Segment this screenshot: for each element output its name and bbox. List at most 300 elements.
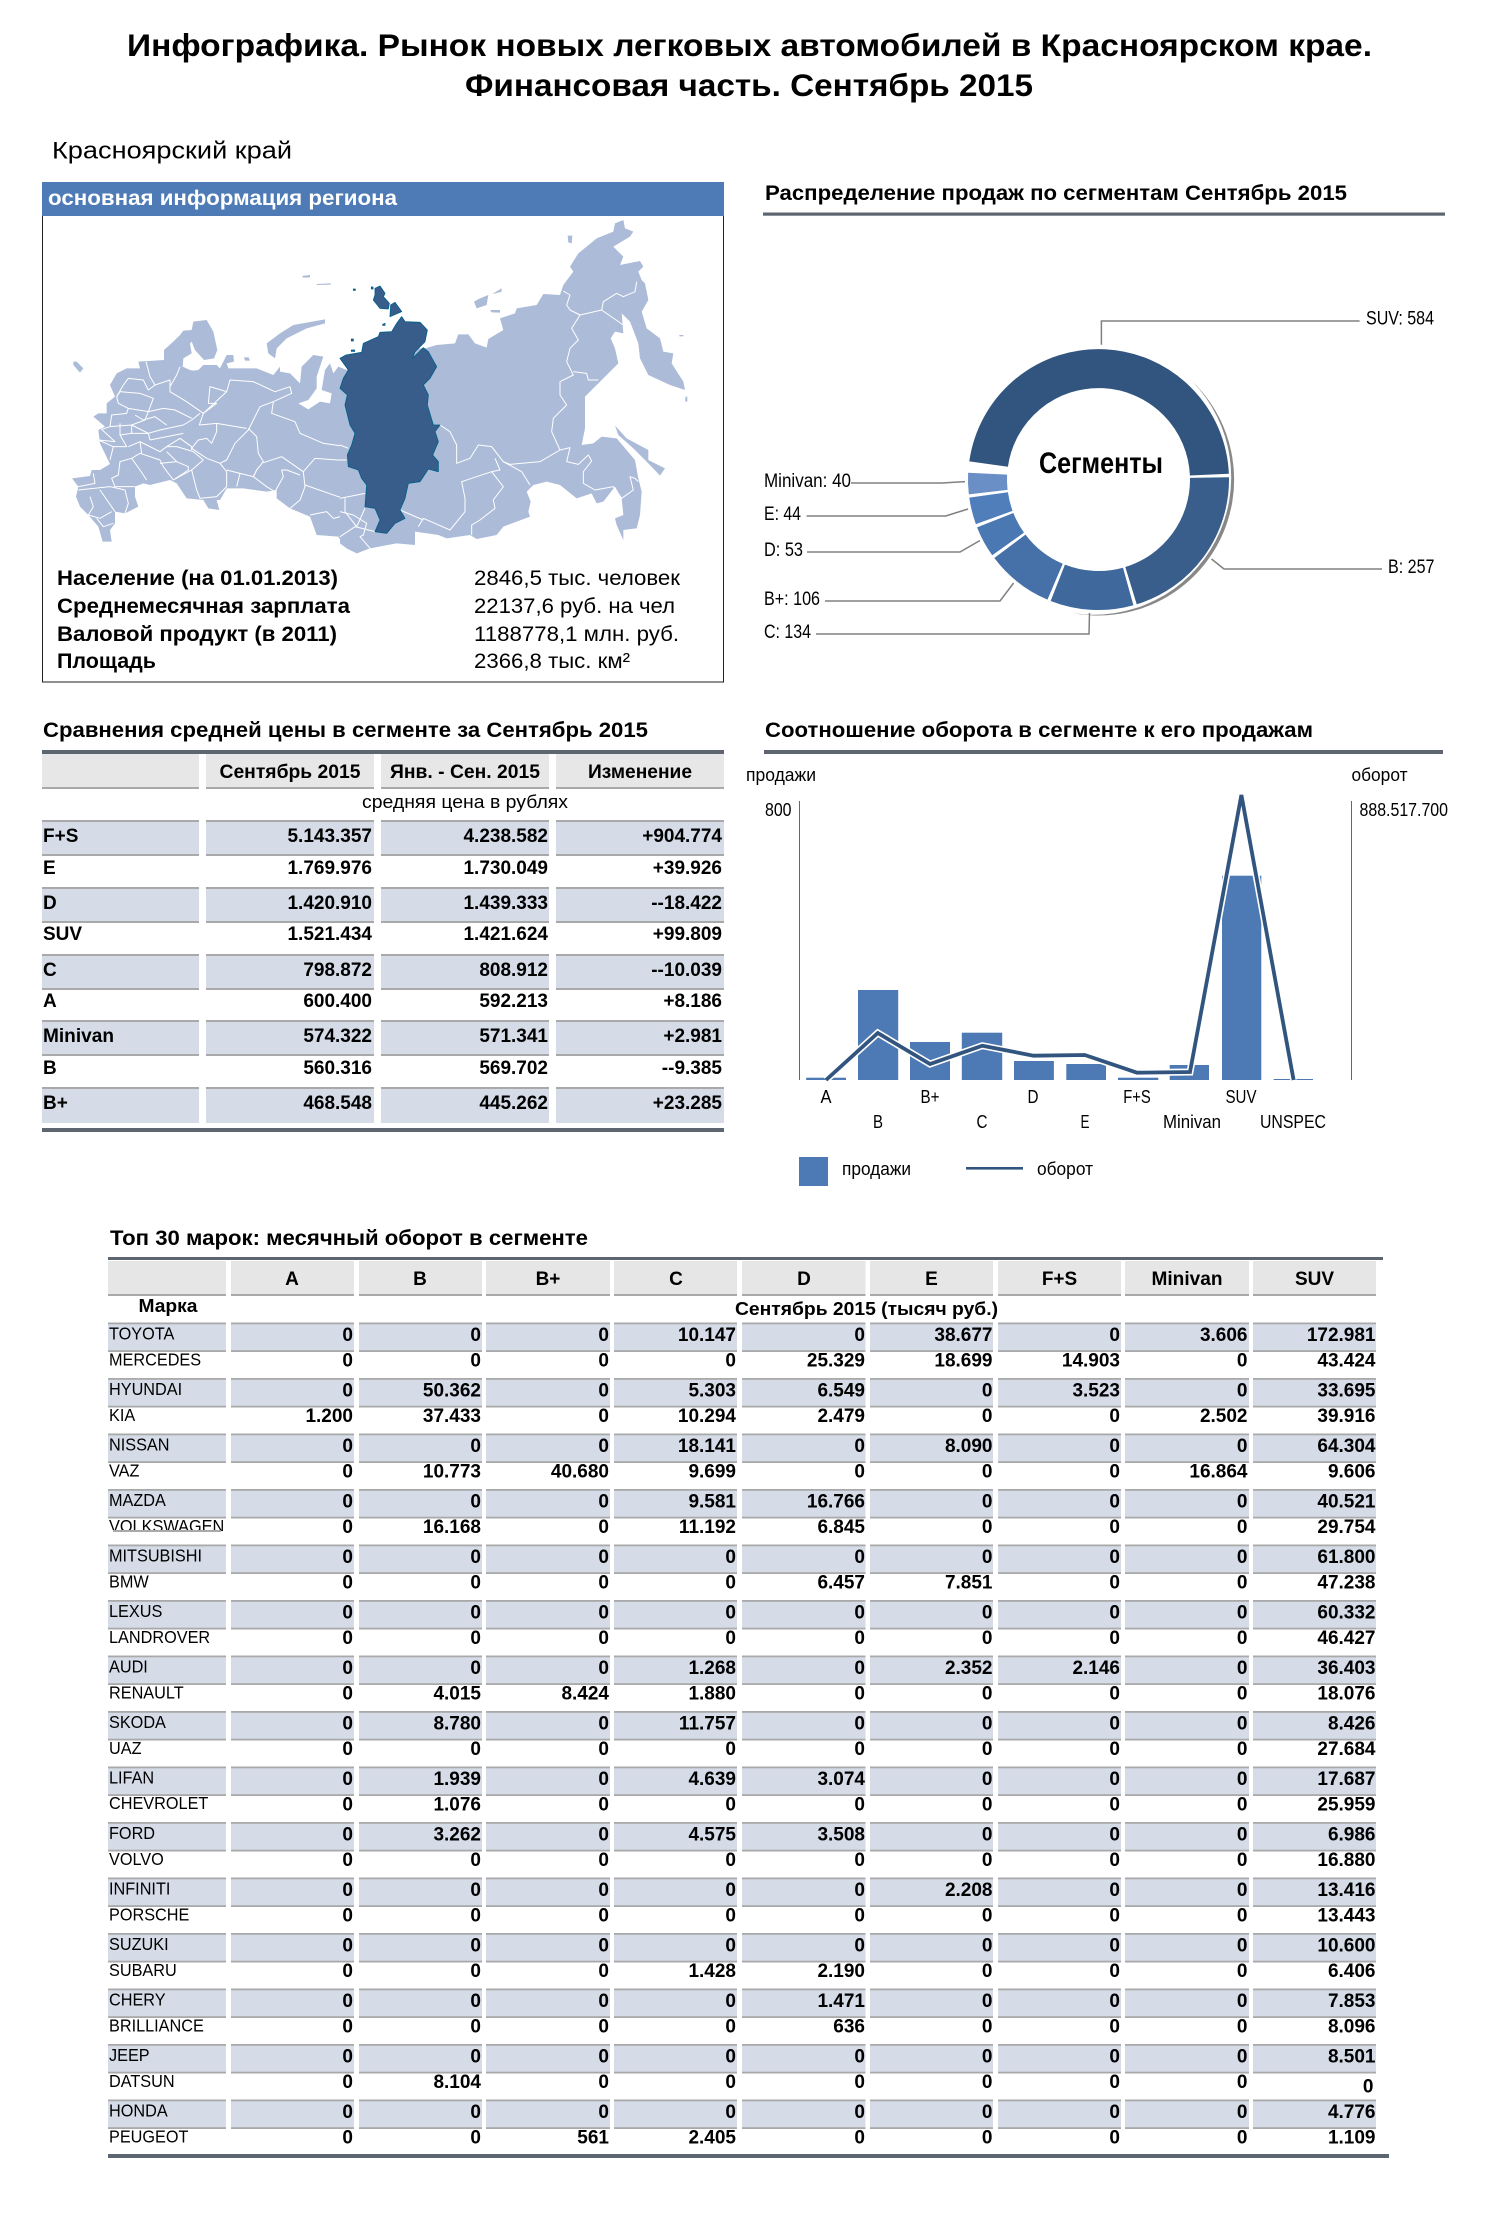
row: C [43, 960, 722, 981]
row: AUDI: 0 [342, 1658, 353, 1679]
row: B: --9.385 [662, 1058, 722, 1079]
row: HYUNDAI: 6.549 [817, 1380, 865, 1402]
row: PORSCHE: 13.443 [1317, 1906, 1376, 1927]
turnover line [826, 795, 1294, 1080]
row: MITSUBISHI: 0 [854, 1547, 865, 1568]
row: B+ [43, 1093, 722, 1114]
row: Minivan: +2.981 [663, 1026, 722, 1047]
row: KIA: 0 [1109, 1406, 1120, 1427]
row: MAZDA: 0 [982, 1492, 992, 1512]
row: BRILLIANCE: 0 [1109, 2017, 1120, 2038]
row: BMW: 0 [342, 1573, 353, 1594]
row: VOLKSWAGEN: 0 [1109, 1517, 1120, 1538]
row: INFINITI: 0 [470, 1880, 481, 1901]
row: CHERY: 7.853 [1328, 1991, 1376, 2012]
row: F+S: +904.774 [642, 826, 722, 847]
row: PEUGEOT: 0 [470, 2128, 481, 2149]
heading: Топ 30 марок: месячный оборот в сегменте [110, 1227, 588, 1250]
row: SUZUKI: SUZUKI [109, 1934, 169, 1954]
row: MERCEDES: 0 [725, 1351, 736, 1372]
row: LEXUS: LEXUS [109, 1601, 162, 1621]
row: MAZDA: 0 [598, 1492, 609, 1512]
row: VAZ: 0 [342, 1462, 353, 1483]
heading [42, 719, 724, 754]
row: LANDROVER: LANDROVER [109, 1627, 210, 1647]
row: AUDI: 0 [854, 1658, 865, 1679]
row: SUBARU: 2.190 [817, 1961, 865, 1982]
row: HYUNDAI: 33.695 [1317, 1380, 1376, 1402]
row: JEEP: 0 [598, 2046, 609, 2068]
row: JEEP: 0 [470, 2046, 481, 2068]
row: VOLKSWAGEN: VOLKSWAGEN [109, 1516, 224, 1536]
row: BMW [109, 1572, 1376, 1594]
row: LEXUS: 0 [1237, 1602, 1248, 1624]
row: JEEP: 0 [854, 2046, 865, 2068]
row: E: E [43, 858, 56, 879]
legend [799, 1157, 1093, 1186]
row: BRILLIANCE: 0 [342, 2017, 353, 2038]
row: VAZ: 0 [854, 1462, 865, 1483]
row: HONDA: 0 [342, 2102, 353, 2123]
row: INFINITI: INFINITI [109, 1879, 170, 1899]
row: BRILLIANCE: 0 [982, 2017, 992, 2038]
row: B [43, 1058, 722, 1079]
axis titles and scale [746, 765, 1448, 1080]
row: HYUNDAI [109, 1379, 1376, 1402]
row: CHERY: 0 [725, 1991, 736, 2012]
row: HONDA: 0 [1237, 2102, 1248, 2123]
row: LEXUS: 0 [854, 1602, 865, 1624]
row: BMW: BMW [109, 1572, 149, 1592]
row: MAZDA: 0 [1109, 1492, 1120, 1512]
row: SKODA: 0 [1237, 1714, 1248, 1734]
table header: Янв. - Сен. 2015 [390, 762, 540, 783]
row: B+: B+ [43, 1093, 68, 1114]
row: BMW: 0 [598, 1573, 609, 1594]
row: PORSCHE [109, 1905, 1376, 1927]
row: SUZUKI: 10.600 [1317, 1936, 1376, 1956]
region statistics: 2846,5 тыс. человек [474, 567, 681, 590]
row: LIFAN: 0 [982, 1769, 992, 1790]
row: MERCEDES: 0 [470, 1351, 481, 1372]
donut segments [987, 369, 1210, 591]
row: AUDI: 2.352 [945, 1658, 992, 1679]
row: MITSUBISHI: 0 [725, 1547, 736, 1568]
row: VAZ: VAZ [109, 1461, 139, 1481]
row: LANDROVER: 0 [982, 1628, 992, 1649]
row bands [42, 820, 724, 1123]
sub-headings: Марка [138, 1296, 199, 1316]
row: VOLVO: 0 [854, 1850, 865, 1871]
row: PEUGEOT: 2.405 [688, 2128, 736, 2149]
row: LIFAN: 0 [1237, 1769, 1248, 1790]
row: MAZDA: MAZDA [109, 1490, 167, 1510]
table header [42, 754, 724, 789]
row: MITSUBISHI: 0 [1237, 1547, 1248, 1568]
row: MAZDA [109, 1490, 1376, 1512]
row: B: 569.702 [479, 1058, 548, 1079]
row: KIA: 2.502 [1200, 1406, 1248, 1427]
row: A: 592.213 [479, 991, 548, 1012]
row: KIA: 2.479 [817, 1406, 865, 1427]
row: UAZ: UAZ [109, 1738, 142, 1758]
row: MERCEDES: 0 [1237, 1351, 1248, 1372]
row: MERCEDES: 43.424 [1317, 1351, 1376, 1372]
row: VOLVO: VOLVO [109, 1849, 164, 1869]
row: KIA: 0 [598, 1406, 609, 1427]
row: CHEVROLET: 1.076 [433, 1795, 481, 1816]
row: BMW: 0 [470, 1573, 481, 1594]
row: CHERY [109, 1990, 1376, 2012]
category labels: C [976, 1112, 988, 1132]
row: LIFAN: 1.939 [433, 1769, 481, 1790]
row: RENAULT: 1.880 [688, 1684, 736, 1705]
row: MAZDA: 0 [342, 1492, 353, 1512]
row: VOLKSWAGEN [109, 1516, 1376, 1538]
row: LANDROVER: 0 [854, 1628, 865, 1649]
row: MERCEDES: 0 [598, 1351, 609, 1372]
row: DATSUN: 0 [982, 2072, 992, 2093]
row: FORD: 6.986 [1328, 1824, 1376, 1846]
region statistics: 1188778,1 млн. руб. [474, 623, 679, 646]
row: MERCEDES: MERCEDES [109, 1350, 201, 1370]
row: TOYOTA: 0 [1109, 1325, 1120, 1346]
row: FORD [109, 1823, 1376, 1846]
row: HYUNDAI: 50.362 [423, 1380, 481, 1402]
row: VOLVO: 0 [1109, 1850, 1120, 1871]
row: CHEVROLET: 0 [1109, 1795, 1120, 1816]
row: VOLVO [109, 1849, 1376, 1871]
row: MAZDA: 9.581 [688, 1492, 736, 1512]
row: A: A [43, 991, 57, 1012]
row: LEXUS [109, 1601, 1376, 1624]
row: VAZ: 16.864 [1189, 1462, 1248, 1483]
table header: A [285, 1269, 299, 1290]
row: NISSAN: 0 [1237, 1436, 1248, 1457]
row: F+S: 5.143.357 [287, 826, 372, 847]
row: PORSCHE: 0 [470, 1906, 481, 1927]
row: CHERY: 0 [982, 1991, 992, 2012]
row: DATSUN: 0 [1237, 2072, 1248, 2093]
row: CHEVROLET: 25.959 [1317, 1795, 1376, 1816]
row: CHERY: 0 [598, 1991, 609, 2012]
row: MAZDA: 0 [470, 1492, 481, 1512]
row: LEXUS: 0 [1109, 1602, 1120, 1624]
category labels [820, 1087, 1326, 1132]
row: TOYOTA: 172.981 [1307, 1325, 1376, 1346]
row: SUV: +99.809 [653, 924, 722, 945]
row: RENAULT: 0 [342, 1684, 353, 1705]
heading [108, 1227, 1383, 1260]
row: INFINITI: 0 [725, 1880, 736, 1901]
row: B+: 445.262 [479, 1093, 548, 1114]
row: LANDROVER: 0 [598, 1628, 609, 1649]
row: SUBARU: 0 [1237, 1961, 1248, 1982]
row: RENAULT: 0 [982, 1684, 992, 1705]
row: VOLVO: 0 [342, 1850, 353, 1871]
row: SKODA [109, 1712, 1376, 1734]
row: CHEVROLET: 0 [342, 1795, 353, 1816]
row: UAZ: 0 [342, 1739, 353, 1760]
row: AUDI: 0 [598, 1658, 609, 1679]
row: UAZ: 0 [598, 1739, 609, 1760]
row: KIA: KIA [109, 1405, 136, 1425]
row: LEXUS: 0 [725, 1602, 736, 1624]
row: LANDROVER [109, 1627, 1376, 1649]
row: LANDROVER: 0 [470, 1628, 481, 1649]
sub-headings: Сентябрь 2015 (тысяч руб.) [735, 1299, 998, 1319]
category labels: UNSPEC [1260, 1112, 1326, 1132]
row: VOLKSWAGEN: 6.845 [817, 1517, 865, 1538]
table header: B [413, 1269, 427, 1290]
row: VOLVO: 0 [598, 1850, 609, 1871]
row: HONDA: 0 [470, 2102, 481, 2123]
row: FORD: FORD [109, 1823, 155, 1843]
row: NISSAN: 64.304 [1317, 1436, 1376, 1457]
category labels: F+S [1123, 1087, 1151, 1107]
panel: price comparison table [42, 719, 724, 1132]
row: KIA [109, 1405, 1376, 1427]
row: BMW: 0 [725, 1573, 736, 1594]
donut centre label: Сегменты [1039, 447, 1163, 480]
category labels: SUV [1226, 1087, 1256, 1107]
row: VAZ: 9.699 [688, 1462, 736, 1483]
panel: region info [42, 182, 724, 682]
row: VOLKSWAGEN: 29.754 [1317, 1517, 1376, 1538]
row: NISSAN: 18.141 [678, 1436, 736, 1457]
axis titles and scale: оборот [1352, 765, 1408, 785]
row: PEUGEOT: 0 [982, 2128, 992, 2149]
row: B: 560.316 [303, 1058, 372, 1079]
row: RENAULT: RENAULT [109, 1683, 184, 1703]
panel header [42, 182, 724, 216]
row: PEUGEOT: 0 [342, 2128, 353, 2149]
row: PORSCHE: 0 [342, 1906, 353, 1927]
row: SUBARU: 0 [1109, 1961, 1120, 1982]
row: AUDI [109, 1657, 1376, 1679]
row bands [108, 1322, 1376, 2130]
row: VAZ: 0 [1109, 1462, 1120, 1483]
row: HONDA: 0 [598, 2102, 609, 2123]
region statistics: Валовой продукт (в 2011) [57, 623, 337, 646]
row: LIFAN: 3.074 [817, 1769, 865, 1790]
row: RENAULT: 0 [1237, 1684, 1248, 1705]
row: CHEVROLET: 0 [598, 1795, 609, 1816]
row: CHERY: 0 [1237, 1991, 1248, 2012]
row: UAZ: 27.684 [1317, 1739, 1376, 1760]
row: TOYOTA: 0 [854, 1325, 865, 1346]
row: A [43, 991, 722, 1012]
category labels: B+ [920, 1087, 940, 1107]
row: VAZ: 10.773 [423, 1462, 481, 1483]
row: JEEP: 0 [725, 2046, 736, 2068]
row: E: 1.769.976 [287, 858, 372, 879]
region statistics: Среднемесячная зарплата [57, 595, 350, 618]
row: BRILLIANCE: 0 [598, 2017, 609, 2038]
row: LIFAN: 17.687 [1317, 1769, 1376, 1790]
row: C: C [43, 960, 57, 981]
row: MITSUBISHI: 0 [598, 1547, 609, 1568]
row: TOYOTA: 0 [598, 1325, 609, 1346]
row: VOLKSWAGEN: 0 [598, 1517, 609, 1538]
row: PORSCHE: 0 [598, 1906, 609, 1927]
row: CHEVROLET: 0 [725, 1795, 736, 1816]
table header: E [925, 1269, 938, 1290]
row: VOLKSWAGEN: 0 [1237, 1517, 1248, 1538]
row: FORD: 0 [1109, 1824, 1120, 1846]
row: DATSUN: 0 [725, 2072, 736, 2093]
row: LIFAN: 0 [342, 1769, 353, 1790]
row: UAZ: 0 [1237, 1739, 1248, 1760]
row: INFINITI: 0 [1109, 1880, 1120, 1901]
row: LANDROVER: 0 [725, 1628, 736, 1649]
row: HYUNDAI: 5.303 [688, 1380, 736, 1402]
row: PEUGEOT: 0 [1109, 2128, 1120, 2149]
row: LIFAN: 0 [1109, 1769, 1120, 1790]
row: HYUNDAI: HYUNDAI [109, 1379, 182, 1399]
panel frame [42, 200, 724, 682]
row: BRILLIANCE: BRILLIANCE [109, 2016, 204, 2036]
row: D: 1.439.333 [463, 893, 548, 914]
row: LEXUS: 0 [982, 1602, 992, 1624]
axis titles and scale: 888.517.700 [1360, 800, 1448, 820]
donut labels: SUV: 584 [1366, 309, 1434, 330]
row: HONDA: 0 [725, 2102, 736, 2123]
row: SKODA: 0 [854, 1714, 865, 1734]
row: BMW: 47.238 [1317, 1573, 1376, 1594]
row: TOYOTA: 0 [342, 1325, 353, 1346]
table header [108, 1261, 1376, 1296]
row: AUDI: 0 [1237, 1658, 1248, 1679]
panel: bar and line chart [746, 719, 1448, 1186]
table header: F+S [1042, 1269, 1077, 1290]
row: LEXUS: 60.332 [1317, 1602, 1376, 1624]
donut labels: B: 257 [1388, 557, 1434, 578]
row: HONDA: 4.776 [1328, 2102, 1376, 2123]
row: Minivan: 574.322 [303, 1026, 372, 1047]
row: DATSUN: 8.104 [433, 2072, 481, 2093]
row: PORSCHE: 0 [725, 1906, 736, 1927]
row: NISSAN: 0 [342, 1436, 353, 1457]
row: FORD: 3.508 [817, 1824, 865, 1846]
row: TOYOTA: 38.677 [934, 1325, 992, 1346]
row: LANDROVER: 0 [1109, 1628, 1120, 1649]
row: C: 808.912 [479, 960, 548, 981]
category labels: B [873, 1112, 883, 1132]
row: DATSUN [109, 2071, 1374, 2098]
row: VAZ: 9.606 [1328, 1462, 1376, 1483]
table header: D [797, 1269, 811, 1290]
row: VOLVO: 0 [1237, 1850, 1248, 1871]
row: SUBARU: SUBARU [109, 1960, 177, 1980]
sub-heading: средняя цена в рублях [362, 792, 568, 812]
region statistics [57, 567, 681, 673]
row: MITSUBISHI: 0 [982, 1547, 992, 1568]
row: MAZDA: 0 [1237, 1492, 1248, 1512]
legend: оборот [1037, 1159, 1093, 1179]
row: INFINITI: 2.208 [945, 1880, 992, 1901]
row: VOLVO: 16.880 [1317, 1850, 1376, 1871]
region statistics: 2366,8 тыс. км² [474, 650, 630, 673]
row: TOYOTA: 3.606 [1200, 1325, 1248, 1346]
row: MAZDA: 16.766 [807, 1492, 865, 1512]
row: RENAULT: 0 [1109, 1684, 1120, 1705]
row: SKODA: 8.780 [433, 1714, 481, 1734]
row: KIA: 0 [982, 1406, 992, 1427]
row: SKODA: 0 [342, 1714, 353, 1734]
row: PORSCHE: 0 [1237, 1906, 1248, 1927]
row: VOLKSWAGEN: 0 [342, 1517, 353, 1538]
row: MITSUBISHI: 0 [1109, 1547, 1120, 1568]
row: BMW: 0 [1237, 1573, 1248, 1594]
category labels: E [1080, 1112, 1090, 1132]
row: SUV: 1.421.624 [463, 924, 548, 945]
row: D: D [43, 893, 57, 914]
row: NISSAN [109, 1435, 1376, 1457]
donut labels: D: 53 [764, 540, 803, 561]
row: MERCEDES [109, 1350, 1376, 1372]
row: CHERY: 0 [342, 1991, 353, 2012]
title: Финансовая часть. Сентябрь 2015 [465, 67, 1033, 103]
row: SUBARU: 0 [470, 1961, 481, 1982]
row: DATSUN: 0 [1363, 2076, 1374, 2098]
leader lines [807, 321, 1382, 634]
title [127, 27, 1372, 103]
row: SKODA: 0 [598, 1714, 609, 1734]
row: INFINITI [109, 1879, 1376, 1901]
row: LANDROVER: 46.427 [1317, 1628, 1376, 1649]
row: Minivan: Minivan [43, 1026, 114, 1047]
table header: Minivan [1152, 1269, 1222, 1290]
row: DATSUN: 0 [598, 2072, 609, 2093]
row: SUZUKI: 0 [725, 1936, 736, 1956]
row: UAZ: 0 [982, 1739, 992, 1760]
row: SKODA: SKODA [109, 1712, 167, 1732]
row: CHEVROLET: 0 [982, 1795, 992, 1816]
row: HYUNDAI: 0 [982, 1380, 992, 1402]
row: CHEVROLET: CHEVROLET [109, 1793, 208, 1813]
row: SKODA: 0 [1109, 1714, 1120, 1734]
row: INFINITI: 0 [342, 1880, 353, 1901]
row: SUV: SUV [43, 924, 82, 945]
row: SUBARU: 6.406 [1328, 1961, 1376, 1982]
row: NISSAN: 0 [1109, 1436, 1120, 1457]
row: FORD: 4.575 [688, 1824, 736, 1846]
row: INFINITI: 0 [1237, 1880, 1248, 1901]
donut labels: B+: 106 [764, 589, 820, 610]
row: JEEP: 0 [982, 2046, 992, 2068]
row: A: +8.186 [663, 991, 722, 1012]
donut labels [764, 309, 1434, 643]
heading: Соотношение оборота в сегменте к его продажам [765, 719, 1313, 742]
row: CHEVROLET: 0 [854, 1795, 865, 1816]
row: AUDI: 2.146 [1072, 1658, 1120, 1679]
row: BMW: 6.457 [817, 1573, 865, 1594]
row: Minivan: 571.341 [479, 1026, 548, 1047]
row: BRILLIANCE [109, 2016, 1376, 2038]
row: CHERY: 0 [1109, 1991, 1120, 2012]
row: DATSUN: 0 [1109, 2072, 1120, 2093]
row: RENAULT: 8.424 [561, 1684, 609, 1705]
row: VOLVO: 0 [725, 1850, 736, 1871]
row: HYUNDAI: 3.523 [1072, 1380, 1120, 1402]
row: SKODA: 8.426 [1328, 1714, 1376, 1734]
row: SUZUKI: 0 [1109, 1936, 1120, 1956]
table header: SUV [1295, 1269, 1334, 1290]
row: NISSAN: 0 [598, 1436, 609, 1457]
row: SUZUKI: 0 [982, 1936, 992, 1956]
category labels: Minivan [1163, 1112, 1221, 1132]
